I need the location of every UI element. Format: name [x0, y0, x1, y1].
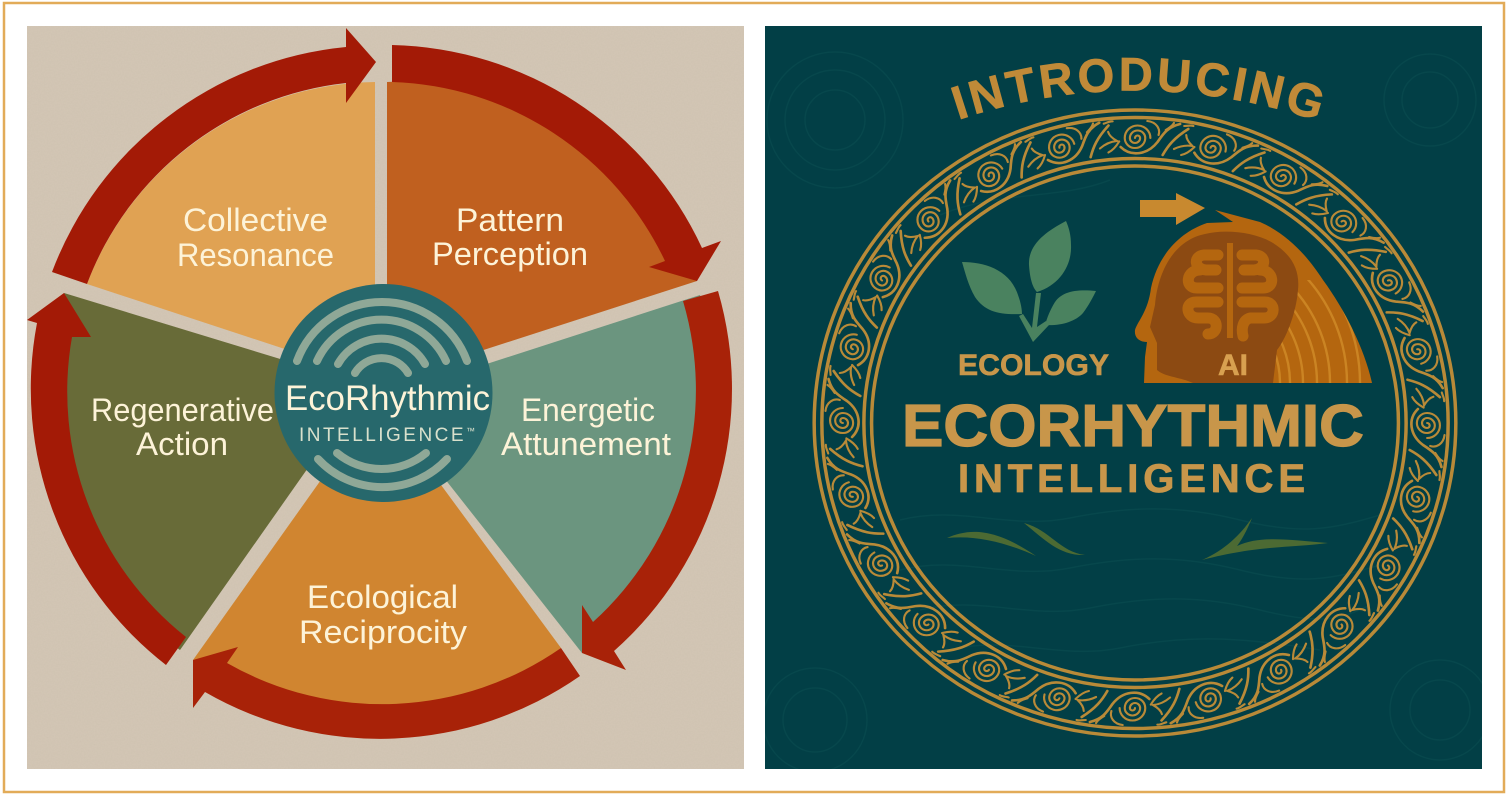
icon: leaf sprout: [962, 221, 1096, 342]
ornamental ring: [814, 110, 1456, 736]
label: collective resonance: [177, 202, 334, 273]
arrow: to regenerative action: [193, 647, 580, 739]
title: intelligence: INTELLIGENCE: [958, 457, 1305, 501]
label: energetic attunement: [501, 392, 671, 462]
arrow: to collective resonance: [27, 293, 186, 665]
hub subtitle: ™: [466, 426, 475, 436]
panel: introducing ecorhythmic intelligence: [765, 26, 1482, 769]
label: pattern perception: Pattern: [456, 202, 564, 238]
hub title: EcoRhythmic: [285, 379, 490, 418]
label: collective resonance: Resonance: [177, 237, 334, 273]
icon: ai head: [1134, 210, 1372, 383]
decorative green swooshes: [947, 518, 1328, 560]
segment: collective resonance: [87, 82, 375, 354]
segment: pattern perception: [387, 81, 697, 356]
label: regenerative action: Regenerative: [91, 392, 274, 428]
icon: rhythm arcs: [297, 302, 467, 487]
brain: [1188, 243, 1273, 338]
segment: ecological reciprocity: [193, 470, 561, 714]
label: ecological reciprocity: Reciprocity: [299, 614, 468, 650]
label: pattern perception: [432, 202, 588, 272]
arrow: ecology to ai: [1140, 193, 1205, 225]
label: energetic attunement: Energetic: [521, 392, 655, 428]
label: ecological reciprocity: Ecological: [307, 579, 458, 615]
label: ai: AI: [1218, 349, 1248, 382]
arrow: to energetic attunement: [392, 45, 721, 281]
label: regenerative action: Action: [136, 426, 228, 462]
heading: introducing: INTRODUCING: [950, 58, 1322, 120]
label: ecology: ECOLOGY: [958, 349, 1109, 382]
label: energetic attunement: Attunement: [501, 426, 671, 462]
label: pattern perception: Perception: [432, 236, 588, 272]
panel: cycle diagram: [27, 26, 744, 769]
label: collective resonance: Collective: [183, 202, 328, 238]
label: regenerative action: [91, 392, 274, 462]
background contour texture: [763, 52, 1490, 772]
hub: ecorhythmic intelligence: [274, 284, 492, 502]
segment: regenerative action: [47, 293, 322, 650]
title: ecorhythmic: ECORHYTHMIC: [902, 393, 1364, 459]
label: ecological reciprocity: [299, 579, 468, 650]
arrow: to ecological reciprocity: [582, 291, 732, 670]
segment: energetic attunement: [430, 295, 716, 653]
hub subtitle: INTELLIGENCE: [299, 425, 464, 446]
arrow: to pattern perception: [52, 28, 376, 284]
